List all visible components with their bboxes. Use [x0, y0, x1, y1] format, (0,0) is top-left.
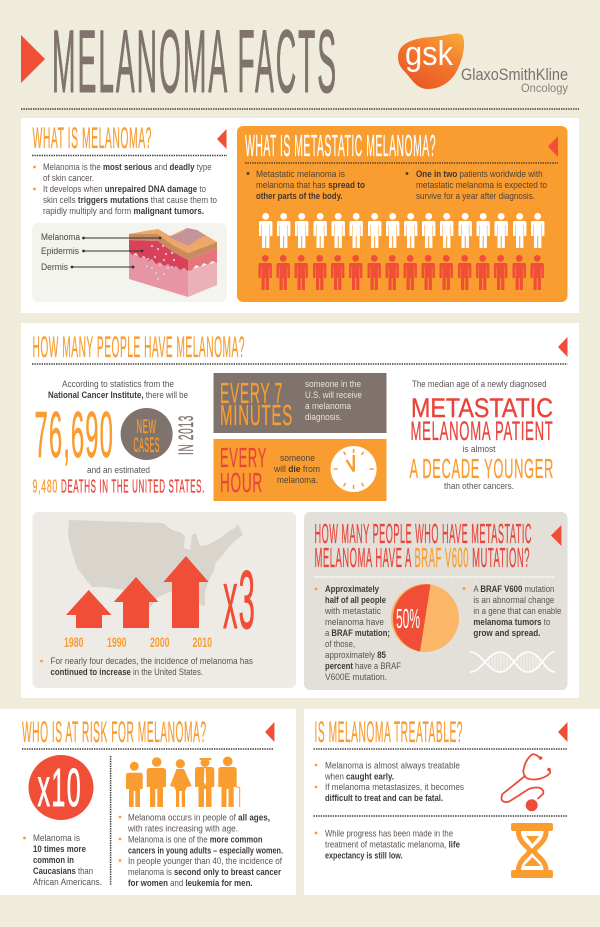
chart: 50 percent pie: 50%: [396, 603, 420, 634]
panel: is melanoma treatable: difficult to treat and can be fatal.: [325, 793, 443, 804]
panel: BRAF V600 mutation: with metastatic: [324, 606, 381, 617]
icon: DNA helix: [470, 652, 555, 672]
text: DEATHS IN THE UNITED STATES.: [61, 476, 205, 496]
logo: GSK: Oncology: [521, 81, 568, 95]
panel: BRAF V600 mutation: V600E mutation.: [325, 672, 387, 683]
callout: every 7 minutes: MINUTES: [220, 400, 293, 432]
diagram: skin layers: [32, 223, 227, 302]
panel: what is melanoma section: [21, 118, 579, 313]
diagram: skin layers: Melanoma: [41, 232, 81, 243]
callout: every 7 minutes: U.S. will receive: [305, 390, 362, 401]
panel: who is at risk: Melanoma occurs in people of all ages,: [128, 812, 270, 824]
panel: what is metastatic melanoma: metastatic melanoma is expected to: [416, 180, 547, 191]
icon: x10 circle: [28, 755, 94, 820]
panel: is melanoma treatable: expectancy is still low.: [325, 850, 403, 862]
callout: every 7 minutes: [214, 373, 386, 433]
text block: median age: is almost: [462, 444, 496, 455]
panel: BRAF V600 mutation: in a gene that can enable: [473, 606, 561, 617]
text block: melanoma description: of skin cancer.: [43, 173, 94, 184]
chart: 50 percent pie: [391, 584, 459, 652]
panel: who is at risk: WHO IS AT RISK FOR MELANOMA?: [22, 716, 207, 749]
panel: is melanoma treatable: If melanoma metastasizes, it becomes: [325, 782, 464, 793]
text block: median age: [410, 379, 554, 492]
panel: who is at risk: cancers in young adults – especially women.: [128, 846, 283, 856]
panel: who is at risk: Caucasians than: [33, 866, 93, 877]
panel: incidence map chart: x3: [223, 553, 256, 646]
panel: BRAF V600 mutation: Approximately: [325, 584, 380, 595]
panel: BRAF V600 mutation: approximately 85: [325, 650, 387, 661]
panel: what is metastatic melanoma: Metastatic melanoma is: [256, 169, 345, 180]
callout: every 7 minutes: diagnosis.: [305, 412, 342, 423]
panel: incidence map chart: For nearly four decades, the incidence of melanoma has: [50, 656, 253, 667]
panel: what is metastatic melanoma: [237, 126, 568, 302]
panel: what is metastatic melanoma: survive for a year after diagnosis.: [416, 191, 535, 202]
statistic: new cases: According to statistics from the: [62, 379, 174, 390]
panel: incidence map chart: 2000: [150, 634, 170, 650]
icon: clock: [331, 446, 377, 492]
callout: every hour: someone: [280, 453, 315, 464]
statistic: new cases: CASES: [134, 434, 160, 457]
panel: is melanoma treatable: Melanoma is almost always treatable: [325, 760, 460, 772]
statistic: new cases: [32, 379, 205, 496]
text block: melanoma description: [33, 162, 217, 217]
callout: every hour: melanoma.: [277, 475, 318, 486]
callout: every hour: HOUR: [220, 467, 263, 498]
panel: BRAF V600 mutation: melanoma have: [325, 617, 384, 628]
panel: incidence map chart: 1990: [107, 634, 127, 650]
panel: who is at risk: common in: [33, 855, 74, 866]
map: United States: [68, 520, 243, 608]
panel: incidence map chart: 1980: [64, 634, 84, 650]
title banner: [21, 11, 338, 111]
callout: every hour: EVERY: [220, 442, 267, 473]
diagram: skin layers: Epidermis: [41, 246, 79, 257]
callout: every hour: will die from: [273, 464, 320, 475]
callout: every 7 minutes: EVERY 7: [220, 378, 283, 410]
panel: is melanoma treatable: treatment of metastatic melanoma, life: [325, 840, 460, 850]
panel: BRAF V600 mutation: is an abnormal change: [473, 595, 554, 606]
panel: is melanoma treatable: While progress has been made in the: [325, 828, 453, 840]
heading: what is melanoma: WHAT IS MELANOMA?: [32, 122, 152, 155]
panel: incidence map chart: continued to increase in the United States.: [50, 667, 203, 678]
panel: who is at risk: Melanoma is: [33, 833, 80, 844]
panel: what is metastatic melanoma: melanoma that has spread to: [256, 180, 365, 191]
heading: what is melanoma: [32, 122, 226, 155]
text block: median age: than other cancers.: [444, 481, 514, 492]
panel: who is at risk: 10 times more: [33, 844, 86, 855]
panel: what is metastatic melanoma: One in two patients worldwide with: [416, 169, 543, 180]
statistic: new cases: National Cancer Institute, there will be: [48, 390, 188, 401]
panel: BRAF V600 mutation: half of all people: [325, 595, 386, 606]
heading: who is at risk: [22, 716, 274, 749]
panel: BRAF V600 mutation: grow and spread.: [473, 628, 540, 639]
panel: what is metastatic melanoma: other parts of the body.: [256, 191, 342, 202]
statistic: new cases: 9,480: [32, 476, 58, 496]
panel: BRAF V600 mutation: a BRAF mutation;: [325, 628, 390, 639]
panel: who is at risk: with rates increasing with age.: [127, 824, 238, 834]
text block: melanoma description: rapidly multiply and form malignant tumors.: [43, 206, 204, 217]
callout: every hour: [214, 439, 386, 501]
panel: incidence map chart: [32, 512, 296, 688]
panel: BRAF V600 mutation: [304, 512, 568, 690]
text block: melanoma description: skin cells triggers mutations that cause them to: [43, 195, 217, 206]
panel: who is at risk: In people younger than 40, the incidence of: [128, 856, 282, 867]
text block: melanoma description: It develops when unrepaired DNA damage to: [43, 184, 206, 195]
statistic: new cases: NEW: [136, 417, 156, 438]
arrows: rising incidence: [66, 556, 209, 628]
callout: every 7 minutes: a melanoma: [305, 401, 352, 412]
panel: BRAF V600 mutation: melanoma tumors to: [473, 617, 550, 628]
text block: median age: METASTATIC: [411, 393, 553, 423]
panel: who is at risk: for women and leukemia for men.: [128, 878, 253, 889]
heading: BRAF mutation: [314, 518, 561, 573]
logo: GSK: gsk: [405, 35, 454, 73]
text block: median age: The median age of a newly diagnosed: [412, 379, 546, 390]
panel: who is at risk: African Americans.: [33, 877, 102, 888]
statistic: new cases: 76,690: [34, 398, 114, 471]
panel: who is at risk: [0, 709, 296, 895]
panel: who is at risk: Melanoma is one of the more common: [128, 834, 263, 846]
panel: who is at risk: melanoma is second only to breast cancer: [128, 867, 281, 878]
panel: BRAF V600 mutation: A BRAF V600 mutation: [473, 584, 554, 595]
logo: GSK: [398, 33, 568, 95]
panel: is melanoma treatable: [304, 709, 600, 895]
logo: GSK: GlaxoSmithKline: [461, 65, 568, 84]
diagram: skin layers: Dermis: [41, 262, 68, 273]
panel: incidence map chart: 2010: [192, 634, 212, 650]
icon: x10 circle: x10: [38, 758, 82, 818]
icon: hourglass: [511, 823, 553, 878]
panel: how many people section: [21, 323, 579, 698]
statistic: new cases: IN 2013: [175, 415, 198, 455]
icon: people of all ages: [126, 756, 240, 807]
panel: BRAF V600 mutation: percent have a BRAF: [325, 661, 401, 672]
statistic: new cases: and an estimated: [87, 465, 150, 476]
text block: melanoma description: Melanoma is the most serious and deadly type: [43, 162, 212, 173]
callout: every 7 minutes: someone in the: [305, 379, 361, 390]
panel: is melanoma treatable: when caught early.: [324, 772, 394, 782]
panel: BRAF V600 mutation: of those,: [325, 639, 355, 650]
icon: stethoscope: [501, 754, 551, 811]
